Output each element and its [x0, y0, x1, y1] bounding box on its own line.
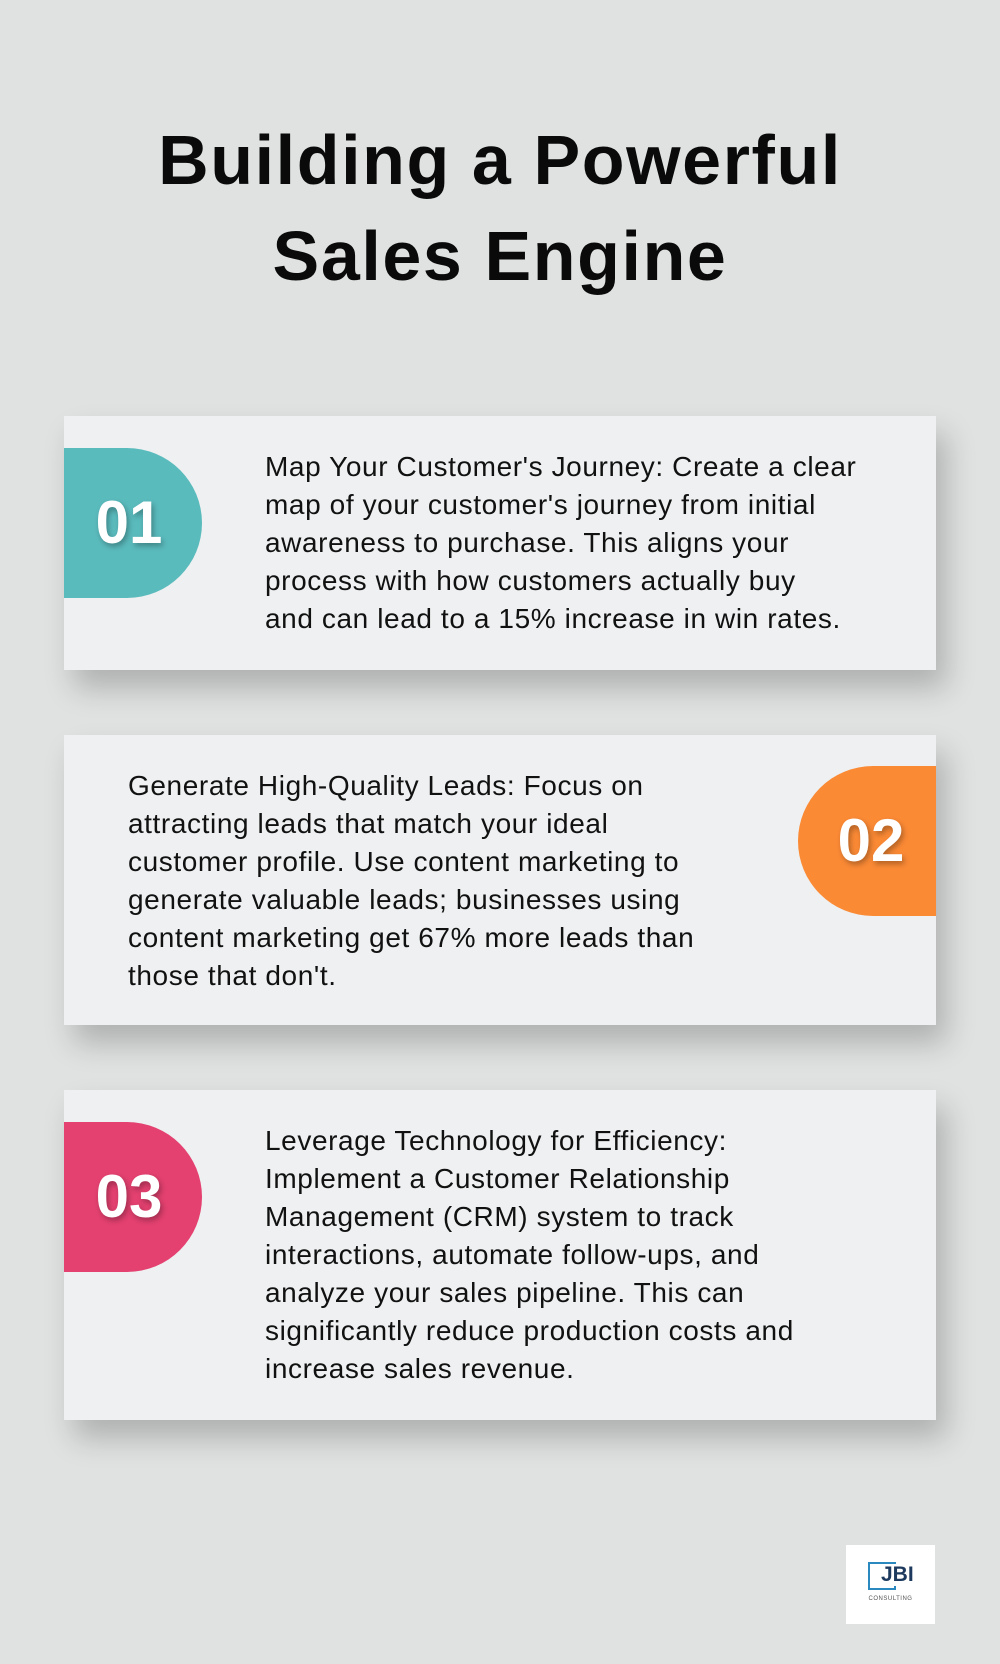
title: Building a Powerful: [158, 121, 842, 199]
text: step 3: increase sales revenue.: [265, 1353, 575, 1384]
text: step 2: those that don't.: [128, 960, 337, 991]
text: step 3: Leverage Technology for Efficiency:: [265, 1125, 727, 1156]
text: step 3: Implement a Customer Relationship: [265, 1163, 730, 1194]
text: step 3: significantly reduce production costs and: [265, 1315, 794, 1346]
logo: [846, 1545, 935, 1624]
title: [158, 121, 842, 295]
text: step 2: customer profile. Use content marketing to: [128, 846, 679, 877]
text: step 1: process with how customers actually buy: [265, 565, 796, 596]
text: step 1: [265, 451, 856, 634]
text: step 2: attracting leads that match your ideal: [128, 808, 608, 839]
text: step 1: awareness to purchase. This aligns your: [265, 527, 789, 558]
text: step 3: [265, 1125, 794, 1384]
text: step 2: Generate High-Quality Leads: Focus on: [128, 770, 644, 801]
panel: step 2: [64, 735, 936, 1025]
badge 02: 02: [838, 807, 904, 874]
panel: step 3: [64, 1090, 936, 1420]
title: Sales Engine: [273, 217, 727, 295]
text: step 1: Map Your Customer's Journey: Create a clear: [265, 451, 856, 482]
badge 03: 03: [96, 1163, 162, 1230]
text: step 1: and can lead to a 15% increase in win rates.: [265, 603, 841, 634]
badge 01: 01: [96, 489, 162, 556]
text: step 2: generate valuable leads; businesses using: [128, 884, 680, 915]
text: step 3: interactions, automate follow-ups, and: [265, 1239, 759, 1270]
badge 03: [64, 1122, 202, 1272]
text: step 3: analyze your sales pipeline. This can: [265, 1277, 744, 1308]
text: step 2: [128, 770, 694, 991]
text: step 1: map of your customer's journey from initial: [265, 489, 816, 520]
badge 01: [64, 448, 202, 598]
panel: step 1: [64, 416, 936, 670]
text: step 3: Management (CRM) system to track: [265, 1201, 734, 1232]
text: step 2: content marketing get 67% more leads than: [128, 922, 694, 953]
logo: JBI: [881, 1563, 914, 1586]
logo: CONSULTING: [869, 1596, 912, 1602]
badge 02: [798, 766, 936, 916]
